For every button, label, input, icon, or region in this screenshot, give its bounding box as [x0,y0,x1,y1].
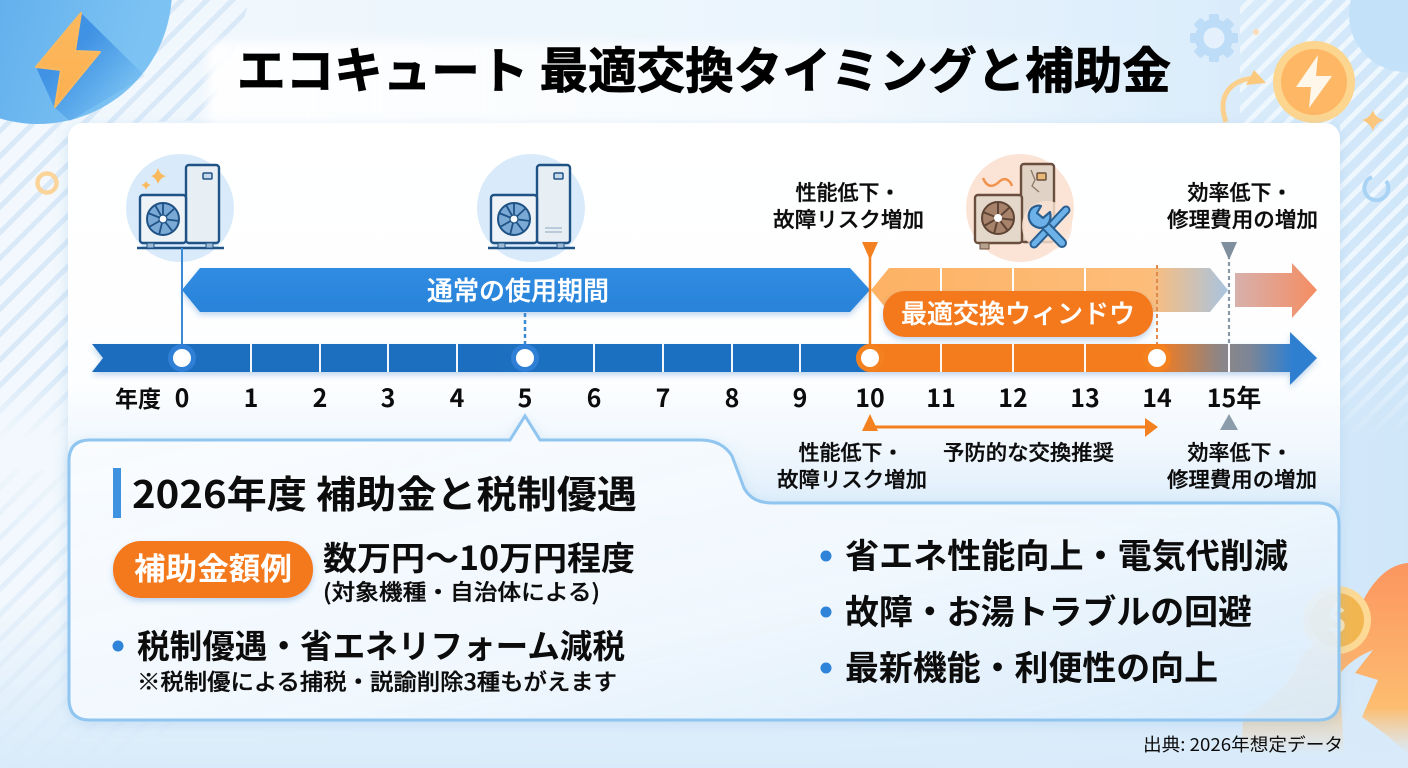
marker triangles above the bar [862,242,1237,260]
year axis labels: 10 [855,379,885,415]
decoration: orange flame and coin [1241,563,1408,768]
year axis labels: 5 [518,379,532,415]
list: replacement benefits: 省エネ性能向上・電気代削減 [845,529,1288,578]
list: replacement benefits: 故障・お湯トラブルの回避 [845,585,1252,634]
text: subsidy amount: 数万円～10万円程度 [323,532,635,580]
decoration: sparkle [1362,110,1384,131]
callout: upper efficiency warning [1167,177,1318,234]
pill: optimal replacement window: 最適交換ウィンドウ [901,294,1135,331]
decoration: orange flame and coin: $ [1327,593,1347,642]
year axis labels: 7 [656,379,670,415]
callout: upper performance warning: 性能低下・ [796,177,900,207]
year axis labels: 4 [450,379,465,415]
title: エコキュート 最適交換タイミングと補助金 [237,32,1171,103]
timeline bar [92,332,1317,385]
marker: efficiency triangle below [1220,414,1238,430]
arrow: normal use period [182,268,870,312]
decoration: blue circle with lightning bolt [0,0,172,124]
year axis labels: 年度 [115,380,161,414]
list: replacement benefits: 最新機能・利便性の向上 [845,641,1218,690]
callout: upper performance warning [773,177,924,234]
source note: 出典: 2026年想定データ [1143,731,1343,757]
panel: timeline [68,123,1340,518]
text: tax benefit bullet: 税制優遇・省エネリフォーム減税 [137,620,625,668]
decoration: ring left [38,174,56,192]
icon: mid-life water heater [477,154,585,262]
callout: upper efficiency warning: 修理費用の増加 [1167,204,1318,234]
arrow: optimal window band [871,268,1228,312]
text: subsidy amount: (対象機種・自治体による) [323,575,600,607]
callout: lower efficiency warning: 修理費用の増加 [1167,464,1317,494]
callout: lower efficiency warning: 効率低下・ [1188,437,1292,467]
timeline nodes [168,344,1171,372]
icon: worn water heater with tools [966,154,1074,262]
callout: lower performance warning: 故障リスク増加 [777,464,927,494]
callout: lower performance warning [777,437,927,494]
year axis labels: 12 [998,379,1028,415]
year axis labels: 11 [926,379,956,415]
text: subsidy amount [323,532,635,607]
decoration: gear [1190,14,1238,62]
year axis labels: 15年 [1207,379,1261,415]
pill: optimal replacement window [883,291,1153,337]
decoration: blue arc ring [1364,177,1388,200]
year axis labels: 0 [175,379,189,415]
year axis labels: 1 [244,379,258,415]
badge: subsidy example: 補助金額例 [134,544,292,589]
text: tax benefit bullet [112,620,625,697]
text: preventive replacement: 予防的な交換推奨 [943,437,1114,467]
arrow: recommended preventive replacement range [862,414,1158,437]
year axis labels: 3 [381,379,395,415]
heading accent and heading: 2026年度 補助金と税制優遇 [132,464,637,519]
year axis labels: 6 [587,379,601,415]
callout: lower efficiency warning [1167,437,1317,494]
panel: subsidies and tax benefits [69,416,1339,720]
title glow [208,42,1168,132]
text: tax benefit bullet: ※税制優による捕税・説諭削除3種もがえます [137,665,617,697]
year axis labels: 8 [725,379,739,415]
list: replacement benefits [820,529,1288,690]
badge: subsidy example [113,541,313,598]
year axis labels [115,379,1261,415]
callout: lower performance warning: 性能低下・ [798,437,904,467]
year axis labels: 2 [313,379,327,415]
year axis labels: 13 [1070,379,1100,415]
callout: upper performance warning: 故障リスク増加 [773,204,924,234]
markers: vertical guide lines [182,248,1229,346]
callout: upper efficiency warning: 効率低下・ [1188,177,1292,207]
decoration: top right circle [1349,0,1408,72]
year axis labels: 14 [1142,379,1172,415]
arrow: after window [1235,263,1317,318]
icon: new water heater [126,154,234,262]
arrow: normal use period: 通常の使用期間 [427,271,609,308]
decoration: coin with bolt and arrow [1223,29,1355,123]
year axis labels: 9 [793,379,807,415]
